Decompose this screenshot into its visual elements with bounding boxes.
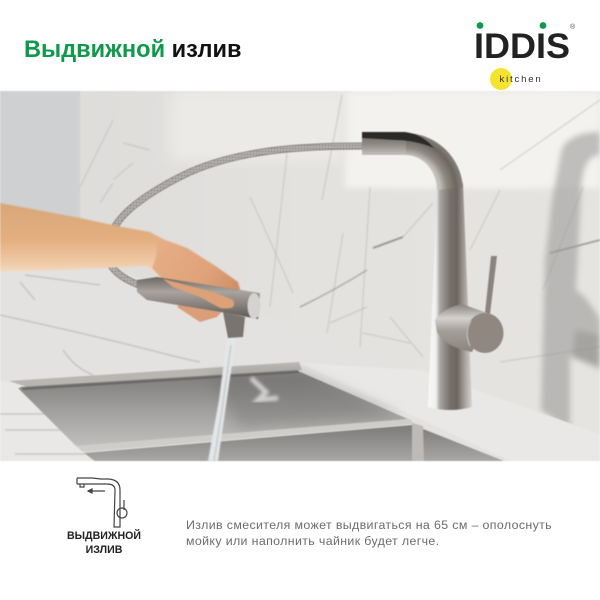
hose	[106, 146, 363, 285]
faucet handle	[435, 304, 504, 353]
water stream	[208, 338, 236, 461]
icon label: ИЗЛИВ	[86, 544, 122, 556]
shadow: faucet on wall	[541, 132, 600, 430]
faucet body	[362, 132, 472, 410]
logo: IDDIS kitchen: ®	[570, 23, 576, 31]
countertop	[0, 268, 600, 461]
photo: pull-out faucet over sink	[0, 90, 600, 462]
wall: marble backsplash	[0, 91, 600, 461]
description text: мойку или наполнить чайник будет легче.	[186, 534, 439, 548]
icon: pull-out faucet	[76, 477, 128, 528]
description text	[186, 518, 552, 548]
title: Выдвижной излив	[24, 37, 242, 63]
thumb	[163, 279, 234, 308]
logo: IDDIS kitchen: IDDIS	[474, 27, 570, 66]
description text: Излив смесителя может выдвигаться на 65 см – ополоснуть	[186, 518, 552, 532]
logo: IDDIS kitchen: kitchen	[500, 74, 542, 85]
faucet lever	[485, 256, 497, 314]
icon label	[67, 529, 141, 556]
arm and hand	[0, 203, 243, 305]
spray head	[137, 277, 260, 338]
icon label: ВЫДВИЖНОЙ	[67, 530, 141, 542]
sink basins	[9, 362, 504, 461]
logo: IDDIS kitchen	[474, 22, 576, 90]
fingers under spray head	[177, 298, 225, 322]
